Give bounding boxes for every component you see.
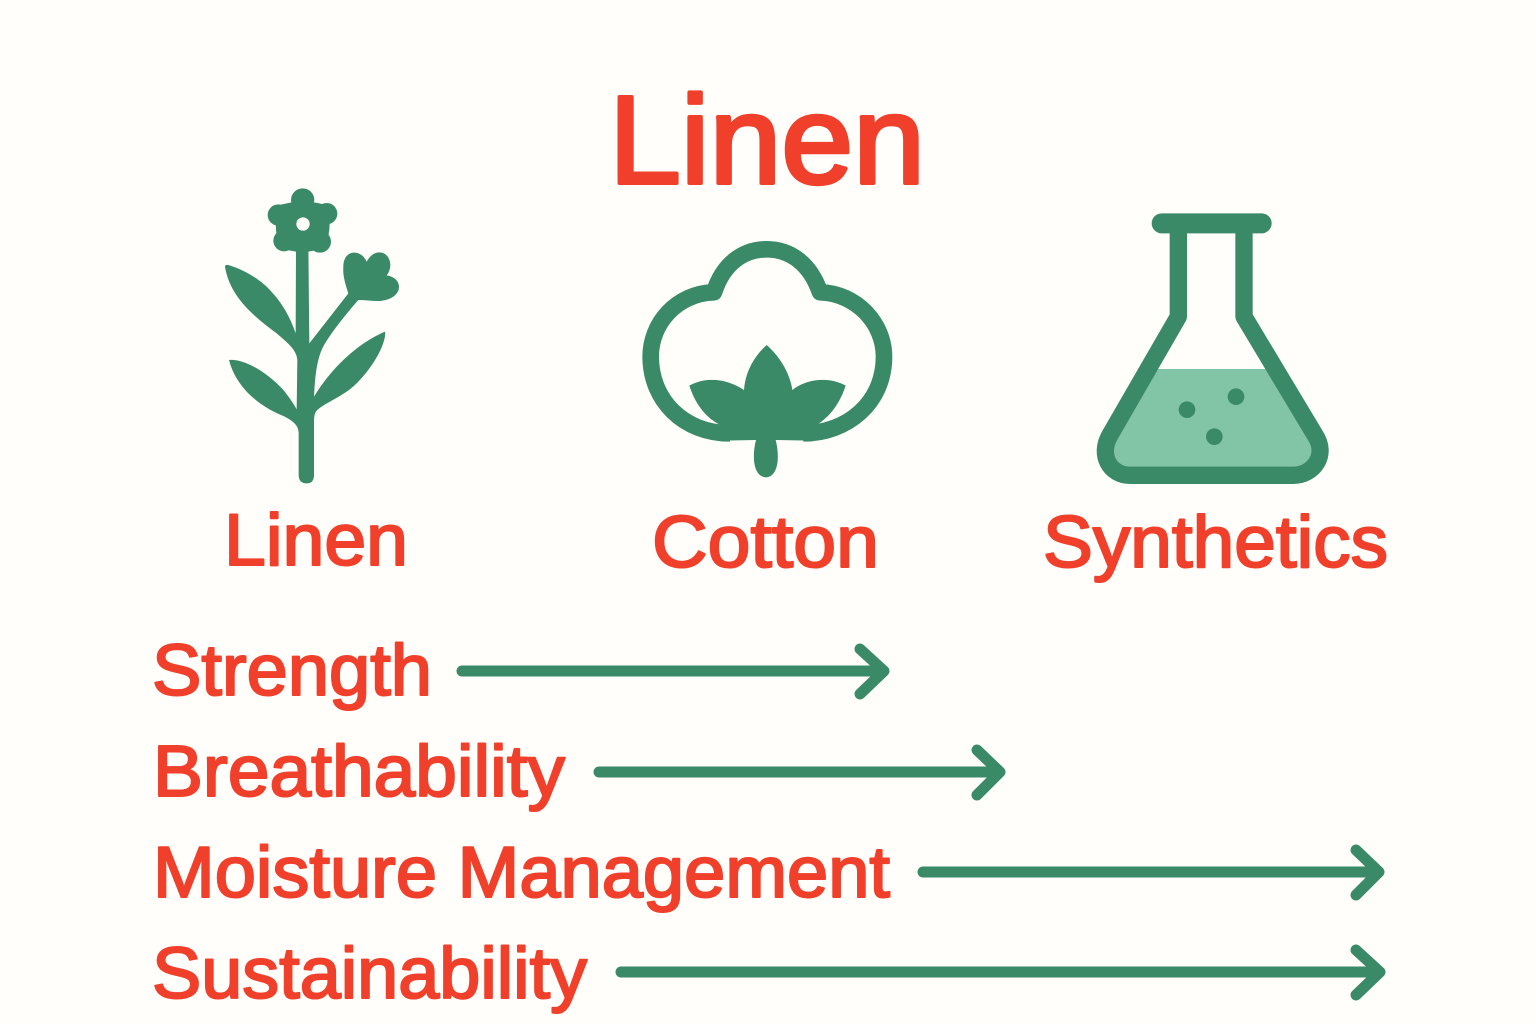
label: Cotton: Cotton	[652, 502, 879, 583]
arrow: Moisture Management	[923, 850, 1379, 895]
row label: Moisture Management: Moisture Management	[153, 833, 890, 913]
label: Linen: Linen	[224, 500, 408, 581]
arrow: Sustainability	[621, 950, 1380, 995]
row label: Sustainability: Sustainability	[152, 934, 587, 1014]
row label: Breathability: Breathability	[153, 732, 565, 812]
arrow: Breathability	[599, 750, 1000, 795]
arrow: Strength	[462, 649, 884, 694]
icon: linen plant	[225, 188, 399, 483]
label: Synthetics: Synthetics	[1043, 502, 1388, 583]
icon: flask	[1105, 213, 1320, 475]
icon: cotton boll	[651, 249, 884, 477]
row label: Strength: Strength	[152, 631, 432, 711]
title: Linen	[609, 71, 925, 210]
